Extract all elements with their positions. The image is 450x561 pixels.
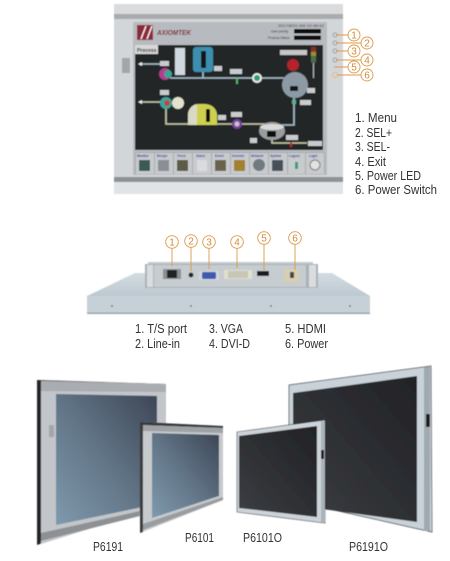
connector housing: [148, 262, 313, 265]
legend: rear connectors: 2. Line-in: [135, 336, 180, 351]
callouts: front panel buttons: 4: [364, 56, 370, 66]
label: P6101: P6101: [185, 530, 214, 545]
rear plate front edge: [87, 296, 370, 314]
side button markers: [332, 33, 338, 78]
menu buttons row: Logout: [289, 154, 301, 158]
callouts: rear connectors: 6: [292, 234, 298, 244]
connector: power: [284, 269, 299, 282]
callouts: front panel buttons: 3: [351, 46, 357, 58]
menu buttons row: Login: [309, 154, 318, 158]
logo bar: [137, 24, 324, 40]
legend: front panel controls: 3. SEL-: [355, 139, 390, 154]
menu buttons row: [135, 152, 325, 174]
menu buttons row: Monitor: [137, 154, 149, 158]
label: P6191O: P6191O: [349, 539, 388, 554]
logo bar: 2017/8/21 AM 10:46:42: [278, 24, 324, 28]
legend: rear connectors: 3. VGA: [209, 321, 243, 336]
process diagram display: [135, 45, 323, 150]
callouts: front panel buttons: 6: [364, 70, 370, 82]
value tags: [160, 61, 322, 146]
rear plate top surface: [87, 273, 370, 296]
label: P6191: P6191: [93, 539, 123, 554]
menu buttons row: Recipe: [157, 154, 168, 158]
pumps and tanks: [159, 68, 171, 80]
connector: T/S port: [163, 269, 181, 279]
panel: rear view with connectors: [87, 262, 370, 314]
legend: front panel controls: 6. Power Switch: [355, 182, 437, 197]
callouts: front panel buttons: 5: [351, 62, 357, 74]
legend: front panel controls: 4. Exit: [355, 154, 386, 169]
connector: VGA: [199, 271, 219, 280]
legend: rear connectors: 4. DVI-D: [209, 336, 250, 351]
callouts: rear connectors: 4: [234, 238, 240, 248]
product: P6191O open frame: [289, 366, 432, 532]
legend: rear connectors: 1. T/S port: [135, 321, 187, 336]
menu buttons row: Trend: [177, 154, 186, 158]
legend: rear connectors: [135, 321, 329, 351]
product: P6101 panel: [140, 422, 223, 533]
menu buttons row: Network: [251, 154, 264, 158]
callouts: rear connectors: 5: [261, 234, 267, 244]
legend: front panel controls: [355, 110, 437, 197]
legend: front panel controls: 1. Menu: [355, 110, 397, 125]
menu buttons row: Inventor: [232, 154, 245, 158]
product: P6101O open frame: [237, 420, 325, 523]
callouts: rear connectors: 1: [169, 238, 175, 248]
pipes: [142, 64, 284, 78]
legend: front panel controls: 2. SEL+: [355, 125, 392, 140]
label: P6101O: P6101O: [243, 530, 282, 545]
menu buttons row: Event: [215, 154, 225, 158]
brand mark on bezel: [122, 58, 130, 73]
logo bar: Process Status: [268, 36, 290, 40]
legend: front panel controls: 5. Power LED: [355, 168, 421, 183]
screen frame: [133, 22, 327, 175]
callouts: rear connectors: [166, 232, 301, 271]
product: P6191 panel: [37, 380, 166, 545]
legend: rear connectors: 5. HDMI: [285, 321, 326, 336]
callouts: front panel buttons: [336, 29, 373, 82]
panel: front view of the touch panel: [114, 4, 343, 194]
callouts: rear connectors: 3: [206, 238, 212, 248]
menu buttons row: System: [270, 154, 282, 158]
legend: rear connectors: 6. Power: [285, 336, 329, 351]
connector: HDMI: [257, 271, 269, 276]
bezel: [114, 4, 343, 194]
menu buttons row: Alarm: [196, 154, 205, 158]
connector: line-in: [189, 273, 193, 277]
connector: DVI-D: [224, 270, 252, 279]
logo bar: AXIOMTEK: [156, 30, 192, 37]
process diagram display: Process: [137, 48, 157, 54]
callouts: front panel buttons: 1: [351, 30, 357, 42]
logo bar: User priority: [271, 30, 289, 34]
callouts: rear connectors: 2: [188, 236, 194, 248]
callouts: front panel buttons: 2: [364, 38, 370, 50]
